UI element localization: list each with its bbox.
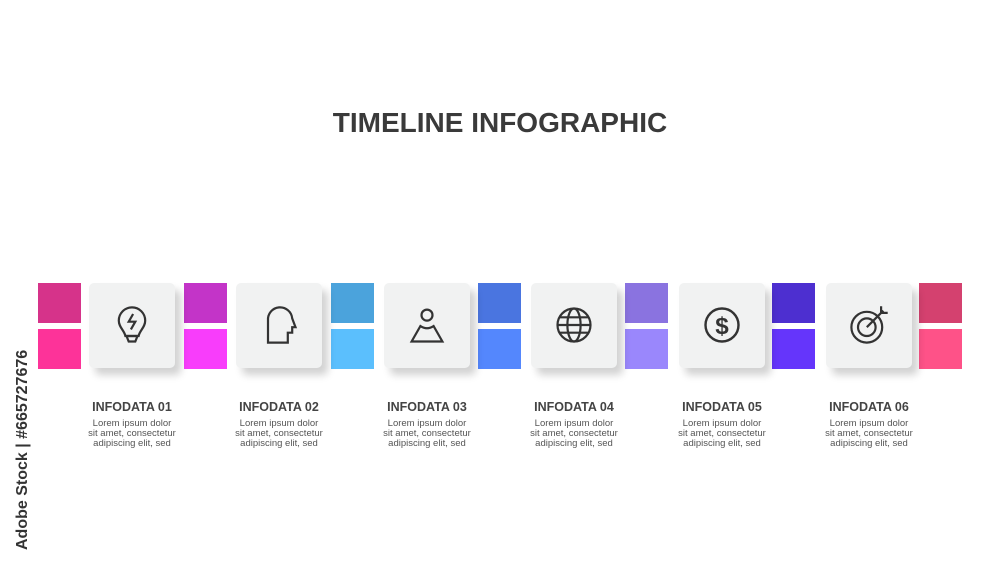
card 3: person bbox=[384, 283, 470, 368]
label 2: sit amet, consectetur bbox=[235, 428, 323, 439]
label 5 bbox=[678, 400, 766, 449]
card 4: globe bbox=[531, 283, 617, 368]
label 1 bbox=[88, 400, 176, 449]
watermark text: Adobe Stock | #665727676 bbox=[14, 350, 31, 550]
label 6: INFODATA 06 bbox=[829, 400, 909, 414]
label 6: adipiscing elit, sed bbox=[830, 438, 908, 449]
label 4 bbox=[530, 400, 618, 449]
card 5: dollar: $ bbox=[715, 313, 729, 340]
color blocks bbox=[38, 283, 962, 369]
label 2: INFODATA 02 bbox=[239, 400, 319, 414]
card 5: dollar bbox=[679, 283, 765, 368]
label 6: Lorem ipsum dolor bbox=[830, 418, 908, 429]
label 5: Lorem ipsum dolor bbox=[683, 418, 761, 429]
card 2: head bbox=[236, 283, 322, 368]
label 5: INFODATA 05 bbox=[682, 400, 762, 414]
label 3: sit amet, consectetur bbox=[383, 428, 471, 439]
card 1: bulb bbox=[89, 283, 175, 368]
label 3 bbox=[383, 400, 471, 449]
label 5: sit amet, consectetur bbox=[678, 428, 766, 439]
label 3: Lorem ipsum dolor bbox=[388, 418, 466, 429]
label 1: adipiscing elit, sed bbox=[93, 438, 171, 449]
label 2: adipiscing elit, sed bbox=[240, 438, 318, 449]
card 6: target bbox=[826, 283, 912, 368]
title: TIMELINE INFOGRAPHIC bbox=[333, 107, 667, 138]
label 6 bbox=[825, 400, 913, 449]
label 3: INFODATA 03 bbox=[387, 400, 467, 414]
label 4: Lorem ipsum dolor bbox=[535, 418, 613, 429]
label 2 bbox=[235, 400, 323, 449]
label 4: sit amet, consectetur bbox=[530, 428, 618, 439]
label 4: INFODATA 04 bbox=[534, 400, 614, 414]
label 4: adipiscing elit, sed bbox=[535, 438, 613, 449]
label 1: INFODATA 01 bbox=[92, 400, 172, 414]
label 1: Lorem ipsum dolor bbox=[93, 418, 171, 429]
label 1: sit amet, consectetur bbox=[88, 428, 176, 439]
label 6: sit amet, consectetur bbox=[825, 428, 913, 439]
label 5: adipiscing elit, sed bbox=[683, 438, 761, 449]
label 3: adipiscing elit, sed bbox=[388, 438, 466, 449]
label 2: Lorem ipsum dolor bbox=[240, 418, 318, 429]
